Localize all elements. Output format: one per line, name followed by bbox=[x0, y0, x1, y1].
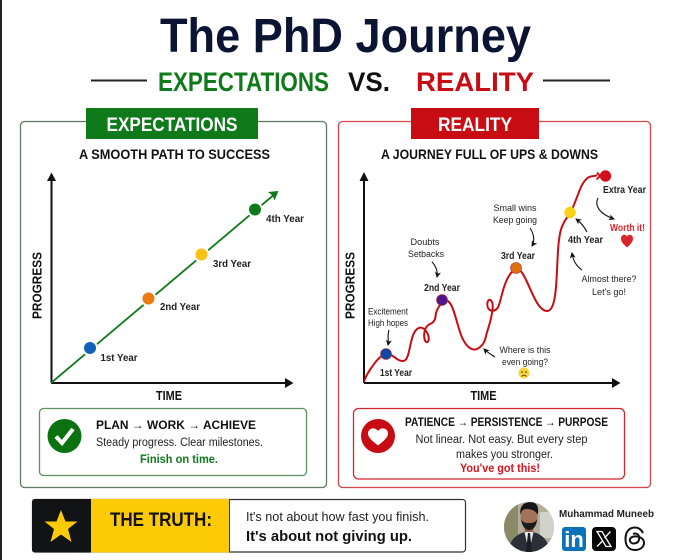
callout: plan work achieve bbox=[40, 408, 306, 476]
icon: heart badge bbox=[361, 419, 395, 453]
icon: threads bbox=[626, 528, 644, 550]
panel tab: expectations bbox=[86, 108, 258, 139]
author portrait bbox=[504, 502, 554, 552]
subtitle: expectations vs reality: EXPECTATIONS bbox=[158, 67, 329, 97]
panel heading: smooth path: A SMOOTH PATH TO SUCCESS bbox=[79, 146, 270, 162]
subtitle: expectations vs reality: REALITY bbox=[416, 67, 534, 97]
line chart: real progress: High hopes bbox=[368, 318, 408, 329]
line chart: expected progress bbox=[30, 172, 304, 403]
icon: check mark bbox=[48, 419, 82, 453]
callout: patience persistence purpose: makes you stronger. bbox=[456, 449, 553, 461]
subtitle: expectations vs reality bbox=[91, 67, 610, 97]
banner: the truth: It's not about how fast you finish. bbox=[246, 510, 429, 524]
line chart: real progress: Where is this bbox=[500, 345, 551, 356]
line chart: expected progress: 1st Year bbox=[100, 352, 138, 364]
icon: x bbox=[592, 527, 616, 551]
line chart: expected progress: 3rd Year bbox=[213, 258, 251, 270]
icon: heart bbox=[621, 235, 633, 248]
banner: the truth: It's about not giving up. bbox=[246, 529, 412, 545]
line chart: expected progress: PROGRESS bbox=[30, 252, 44, 319]
banner: the truth: THE TRUTH: bbox=[110, 510, 212, 531]
title: The PhD Journey bbox=[160, 10, 531, 63]
line chart: real progress: 3rd Year bbox=[501, 250, 535, 262]
line chart: real progress: TIME bbox=[470, 389, 496, 403]
line chart: real progress: Let's go! bbox=[592, 287, 626, 298]
panel: reality bbox=[338, 108, 650, 488]
line chart: real progress: even going? bbox=[502, 357, 548, 368]
panel tab: reality bbox=[411, 108, 539, 139]
callout: patience persistence purpose bbox=[354, 408, 624, 479]
line chart: expected progress: 4th Year bbox=[266, 213, 304, 225]
line chart: expected progress: TIME bbox=[156, 389, 182, 403]
icon: linkedin: in bbox=[564, 527, 584, 552]
line chart: real progress: Keep going bbox=[493, 215, 537, 226]
line chart: expected progress: 2nd Year bbox=[160, 301, 200, 313]
banner: the truth bbox=[32, 499, 466, 552]
callout: patience persistence purpose: Not linear. Not easy. But every step bbox=[416, 434, 588, 446]
callout: patience persistence purpose: You've got this! bbox=[460, 461, 540, 475]
author name: Muhammad Muneeb bbox=[559, 509, 654, 520]
line chart: real progress: 4th Year bbox=[568, 234, 603, 246]
callout: patience persistence purpose: PATIENCE → PERSISTENCE → PURPOSE bbox=[405, 415, 608, 429]
line chart: real progress: Doubts bbox=[410, 237, 440, 248]
callout: plan work achieve: PLAN → WORK → ACHIEVE bbox=[96, 418, 256, 432]
icon: star bbox=[44, 510, 78, 542]
panel: expectations bbox=[20, 108, 326, 488]
panel tab: expectations: EXPECTATIONS bbox=[106, 115, 238, 136]
line chart: real progress bbox=[344, 170, 646, 403]
line chart: real progress: Almost there? bbox=[582, 274, 636, 285]
line chart: real progress: Worth it! bbox=[610, 223, 645, 234]
subtitle: expectations vs reality: VS. bbox=[348, 67, 390, 97]
callout: plan work achieve: Steady progress. Clear milestones. bbox=[96, 437, 263, 449]
line chart: real progress: 2nd Year bbox=[424, 282, 460, 294]
line chart: real progress: Extra Year bbox=[603, 184, 646, 196]
panel heading: ups and downs: A JOURNEY FULL OF UPS & DOWNS bbox=[381, 146, 598, 162]
line chart: real progress: PROGRESS bbox=[344, 252, 358, 319]
icon: sad face bbox=[518, 368, 530, 378]
callout: plan work achieve: Finish on time. bbox=[140, 454, 218, 466]
line chart: real progress: Excitement bbox=[368, 306, 408, 318]
line chart: real progress: 1st Year bbox=[380, 367, 412, 379]
panel tab: reality: REALITY bbox=[438, 115, 512, 136]
line chart: real progress: Setbacks bbox=[408, 249, 444, 260]
line chart: real progress: Small wins bbox=[494, 203, 537, 214]
